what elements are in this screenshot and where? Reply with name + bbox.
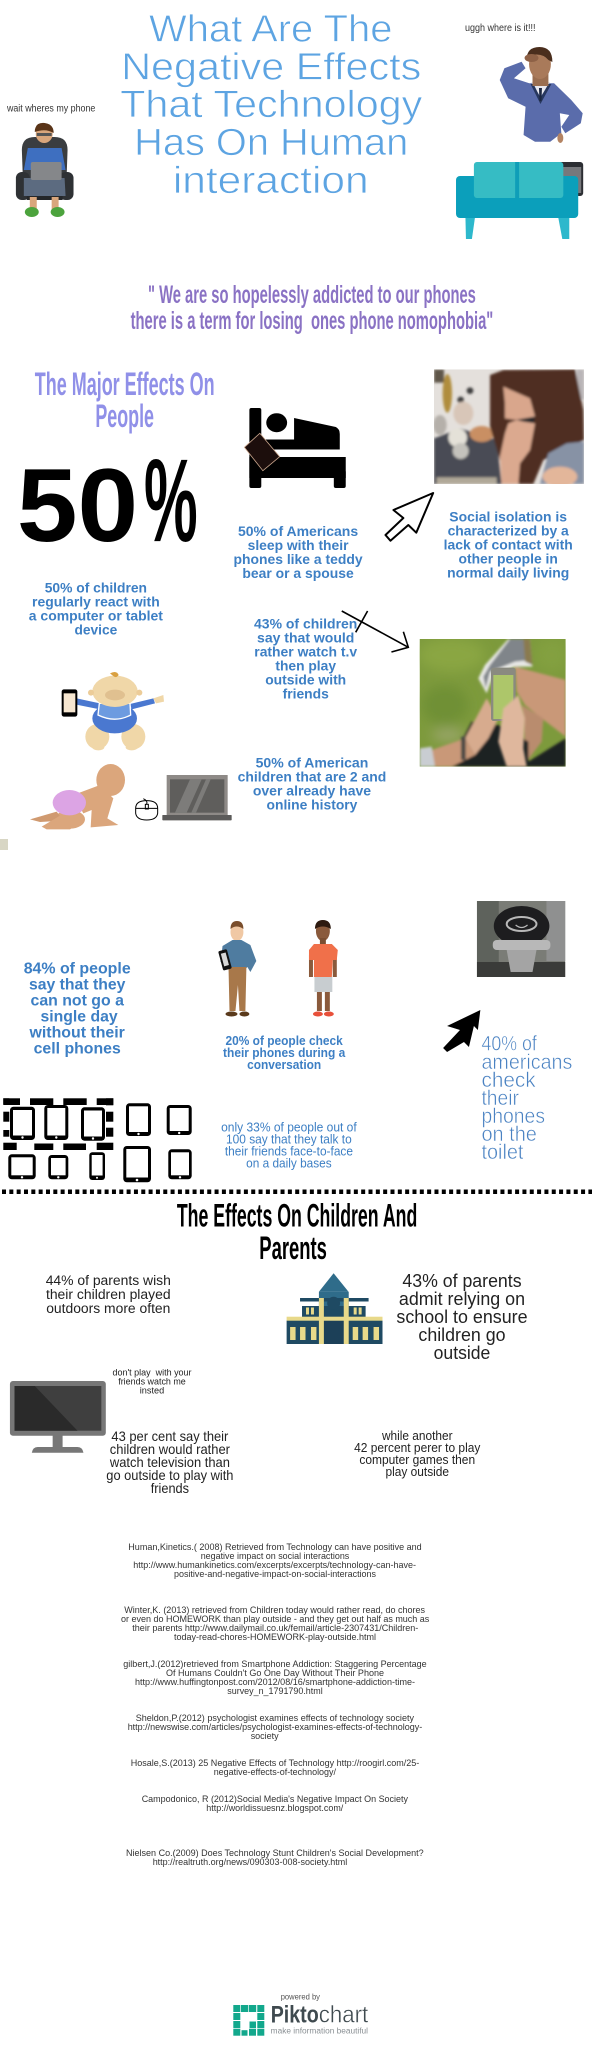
- speech text: watch me instead: friends watch me: [118, 1377, 186, 1388]
- arrow: to outdoor photo: [342, 611, 408, 652]
- text: 84% of people: 84% of people: [24, 961, 131, 978]
- title: What Are The: [149, 9, 392, 51]
- text: 50% of Americans: sleep with their: [248, 537, 349, 553]
- references: survey_n_1791790.html: [227, 1685, 323, 1696]
- text: 43 per cent: children would rather: [110, 1442, 230, 1457]
- references: http://www.huffingtonpost.com/2012/08/16/smartphone-addiction-time-: [135, 1676, 415, 1687]
- text: 40% of americans: americans: [481, 1051, 572, 1074]
- text: 50% of children: 50% of children: [45, 580, 147, 596]
- text: 43 per cent: 43 per cent say their: [111, 1429, 229, 1444]
- icon: computer mouse: [136, 799, 158, 820]
- speech text: watch me instead: don't play with your: [112, 1368, 192, 1379]
- text: while another 42 percent: 42 percent perer to play: [354, 1440, 481, 1455]
- text: 43% of parents: [396, 1271, 528, 1363]
- text: social isolation: characterized by a: [448, 523, 569, 539]
- icon: person in chair with laptop: [16, 123, 74, 217]
- icon: laptop: [162, 775, 232, 820]
- heading: the effects on children and parents: [177, 1198, 417, 1266]
- references: http://www.humankinetics.com/excerpts/excerpts/technology-can-have-: [133, 1559, 416, 1570]
- text: while another 42 percent: play outside: [385, 1464, 449, 1479]
- text: 40% of americans: phones: [481, 1105, 545, 1128]
- references: [121, 1541, 430, 1867]
- text: 43% of children: then play: [275, 658, 336, 674]
- references: Campodonico, R (2012)Social Media's Negative Impact On Society: [142, 1793, 408, 1804]
- text: social isolation: other people in: [459, 551, 558, 567]
- references: negative-effects-of-technology/: [214, 1766, 336, 1777]
- text: 50% of children: a computer or tablet: [29, 608, 163, 624]
- references: today-read-chores-HOMEWORK-play-outside.html: [174, 1631, 376, 1642]
- text: 40% of americans: their: [481, 1087, 519, 1110]
- text: 50% of children: [29, 580, 163, 638]
- piktochart logo: make information beautiful: [271, 2027, 368, 2036]
- references: Winter,K. (2013) retrieved from Children today would rather read, do chores: [124, 1604, 425, 1615]
- icon: confused man: [500, 47, 583, 143]
- references: their parents http://www.dailymail.co.uk/femail/article-2307431/Children-: [132, 1622, 418, 1633]
- text: 43% of parents: 43% of parents: [402, 1271, 522, 1291]
- illustration: crawling baby: [30, 764, 125, 829]
- illustration: baby holding a phone: [62, 672, 164, 750]
- illustration: man with phone: [218, 921, 256, 1016]
- references: positive-and-negative-impact-on-social-interactions: [174, 1568, 376, 1579]
- text: 84% of people: without their: [29, 1025, 125, 1042]
- references: negative impact on social interactions: [201, 1550, 350, 1561]
- text: 50% of American children: children that are 2 and: [238, 769, 386, 785]
- icon: television: [10, 1381, 106, 1453]
- text: 43 per cent: go outside to play with: [106, 1468, 233, 1483]
- references: Sheldon,P.(2012) psychologist examines effects of technology society: [136, 1712, 414, 1723]
- heading: the effects on children and parents: The Effects On Children And: [177, 1198, 417, 1234]
- text: 43% of children: say that would: [257, 630, 354, 646]
- text: 44% of parents: 44% of parents wish: [46, 1272, 171, 1288]
- text: 50% of American children: [238, 755, 386, 813]
- text: 43% of children: 43% of children: [254, 616, 357, 632]
- references: Of Humans Couldn't Go One Day Without Their Phone: [166, 1667, 384, 1678]
- piktochart logo: chart: [319, 2002, 369, 2029]
- piktochart logo: powered by: [281, 1991, 321, 2001]
- text: 50% of Americans: phones like a teddy: [233, 551, 363, 567]
- text: 50% of children: regularly react with: [32, 594, 160, 610]
- text: 84% of people: single day: [40, 1009, 118, 1026]
- text: 43% of children: rather watch t.v: [254, 644, 357, 660]
- references: Human,Kinetics.( 2008) Retrieved from Technology can have positive and: [128, 1541, 422, 1552]
- text: 40% of americans: 40% of: [481, 1033, 537, 1056]
- title: That Technology: [120, 84, 422, 126]
- arrow: cursor pointing to photo: [385, 493, 433, 541]
- text: while another 42 percent: computer games then: [359, 1452, 475, 1467]
- text: while another 42 percent: while another: [381, 1428, 453, 1443]
- text: 50% of American children: online history: [267, 797, 358, 813]
- big number 50%: [17, 435, 198, 566]
- title: interaction: [173, 160, 369, 202]
- text: 43% of parents: outside: [434, 1343, 490, 1363]
- icon: couch hiding a phone: [456, 162, 583, 239]
- piktochart logo: Pikto: [271, 2002, 319, 2029]
- references: gilbert,J.(2012)retrieved from Smartphone Addiction: Staggering Percentage: [123, 1658, 427, 1669]
- text: 44% of parents: outdoors more often: [46, 1300, 170, 1316]
- heading: the major effects on people: [35, 366, 215, 434]
- photo: legs and phone on grass: [418, 638, 568, 767]
- text: 40% of americans: check: [481, 1069, 536, 1092]
- text: only 33% of people: their friends face-to-face: [225, 1144, 353, 1159]
- text: 40% of americans: toilet: [481, 1141, 524, 1164]
- text: social isolation: lack of contact with: [444, 537, 573, 553]
- references: society: [251, 1730, 279, 1741]
- text: 43% of children: outside with: [265, 672, 346, 688]
- text: 50% of American children: over already have: [253, 783, 371, 799]
- text: while another 42 percent: [354, 1428, 481, 1479]
- quote: [131, 281, 493, 335]
- text: 44% of parents: [46, 1272, 171, 1316]
- text: social isolation: Social isolation is: [449, 509, 567, 525]
- arrow: thick arrow to toilet photo: [443, 1010, 480, 1052]
- text: 43% of parents: children go: [418, 1325, 506, 1345]
- text: 50% of Americans: [233, 523, 363, 581]
- text: social isolation: normal daily living: [447, 565, 569, 581]
- text: 43% of children: friends: [283, 686, 329, 702]
- big number 50%: 50: [17, 447, 138, 563]
- small image fragment: [0, 839, 8, 850]
- text: 43% of children: [254, 616, 357, 702]
- caption: ugh where is it: uggh where is it!!!: [465, 23, 535, 34]
- text: 43% of parents: admit relying on: [399, 1289, 525, 1309]
- text: 50% of Americans: 50% of Americans: [238, 523, 358, 539]
- photo: toilet: [477, 901, 565, 977]
- references: http://newswise.com/articles/psychologist-examines-effects-of-technology-: [128, 1721, 422, 1732]
- references: http://realtruth.org/news/090303-008-society.html: [153, 1856, 347, 1867]
- text: only 33% of people: on a daily bases: [246, 1156, 332, 1171]
- text: 50% of American children: 50% of American: [256, 755, 368, 771]
- references: http://worldissuesnz.blogspot.com/: [206, 1802, 344, 1813]
- illustration: boy: [309, 920, 338, 1016]
- title: Has On Human: [134, 122, 408, 164]
- text: only 33% of people: 100 say that they talk to: [226, 1132, 352, 1147]
- text: 44% of parents: their children played: [46, 1286, 171, 1302]
- text: only 33% of people: [221, 1120, 357, 1171]
- title: Negative Effects: [121, 46, 421, 88]
- text: 43% of parents: school to ensure: [396, 1307, 528, 1327]
- text: 84% of people: say that they: [29, 977, 126, 994]
- references: Hosale,S.(2013) 25 Negative Effects of Technology http://roogirl.com/25-: [131, 1757, 419, 1768]
- text: 50% of Americans: bear or a spouse: [242, 565, 354, 581]
- references: or even do HOMEWORK than play outside - and they get out half as much as: [121, 1613, 430, 1624]
- text: 50% of children: device: [75, 622, 117, 638]
- references: Nielsen Co.(2009) Does Technology Stunt Children's Social Development?: [126, 1847, 424, 1858]
- title: [120, 9, 422, 202]
- text: social isolation: [444, 509, 573, 581]
- text: 84% of people: [24, 961, 131, 1058]
- text: 20% of people check: [223, 1034, 345, 1072]
- big number 50%: %: [144, 435, 198, 566]
- text: only 33% of people: only 33% of people out of: [221, 1120, 357, 1135]
- text: 40% of americans: [481, 1033, 572, 1164]
- caption: wait wheres my phone: wait wheres my phone: [6, 104, 96, 115]
- text: 43 per cent: watch television than: [109, 1455, 230, 1470]
- piktochart logo: [233, 1991, 369, 2036]
- text: 84% of people: can not go a: [31, 993, 124, 1010]
- heading: the major effects on people: People: [95, 398, 154, 434]
- text: 20% of people check: their phones during a: [223, 1046, 345, 1060]
- speech text: watch me instead: insted: [140, 1386, 164, 1397]
- text: 43 per cent: [106, 1429, 233, 1496]
- icon: bed with phone: [244, 408, 346, 488]
- heading: the effects on children and parents: Parents: [259, 1230, 327, 1266]
- speech text: watch me instead: [112, 1368, 192, 1397]
- text: 43 per cent: friends: [151, 1481, 189, 1496]
- photo: woman on the phone: [433, 369, 584, 487]
- icon grid: tablets and phones: [3, 1098, 192, 1182]
- heading: the major effects on people: The Major Effects On: [35, 366, 215, 402]
- text: 20% of people check: conversation: [247, 1058, 321, 1072]
- text: 84% of people: cell phones: [34, 1041, 121, 1058]
- icon: school building: [287, 1273, 382, 1344]
- text: 20% of people check: 20% of people check: [226, 1034, 343, 1048]
- text: 40% of americans: on the: [481, 1123, 537, 1146]
